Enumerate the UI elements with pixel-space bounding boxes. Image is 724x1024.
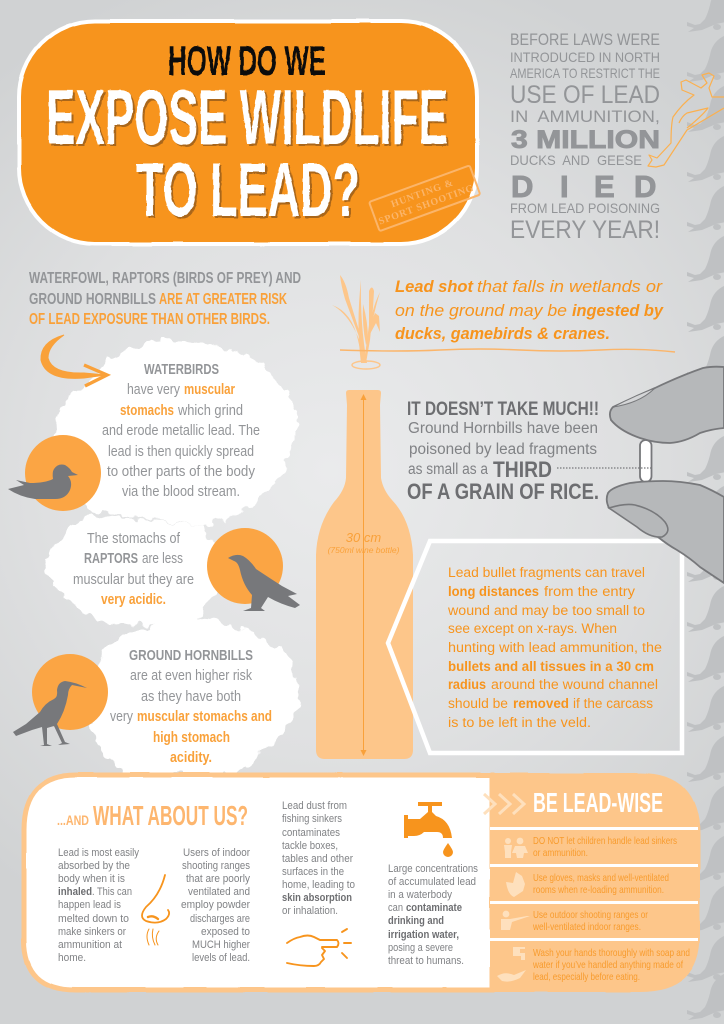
title: how do we: HOW DO WE xyxy=(168,37,326,84)
ground hornbills text: very xyxy=(110,709,134,725)
intro statistic text block: INTRODUCED IN NORTH xyxy=(510,49,660,65)
icon: pointing hand xyxy=(287,929,351,966)
text: waterbody: in a waterbody xyxy=(388,889,452,901)
bullet fragments text: should be xyxy=(448,696,508,711)
heading: birds at greater risk xyxy=(29,270,301,328)
raptors text: very acidic. xyxy=(101,592,166,608)
arrow: 30 cm height xyxy=(360,394,366,756)
text: inhaled: make sinkers or xyxy=(58,926,126,938)
text: inhaled: body when it is xyxy=(58,873,125,885)
bottom finger xyxy=(607,481,724,583)
intro statistic text block: 3 MILLION xyxy=(511,126,660,154)
text: inhaled: happen lead is xyxy=(58,899,121,911)
text: waterbody: drinking and xyxy=(388,915,444,927)
intro statistic text block: EVERY YEAR! xyxy=(510,216,660,244)
title: to lead xyxy=(136,148,362,235)
text: waterbody: Large concentrations xyxy=(388,863,478,875)
ground hornbills text: muscular stomachs and xyxy=(137,709,272,725)
raptors text: The stomachs of xyxy=(87,531,181,547)
text: lead dust xyxy=(282,800,355,917)
callout: lead shot xyxy=(395,277,664,343)
text: indoor shooting ranges: exposed to xyxy=(201,926,250,938)
waterbirds text xyxy=(102,362,260,500)
text: lead dust: tackle boxes, xyxy=(282,840,338,852)
heading: birds at greater risk: ARE AT GREATER RISK xyxy=(159,291,288,308)
panel: ground hornbills xyxy=(13,648,272,766)
raptors text xyxy=(73,531,194,608)
text block: it doesn't take much: THIRD xyxy=(493,457,552,482)
bullet fragments text: from the entry xyxy=(544,584,635,599)
intro statistic text block: IN AMMUNITION, xyxy=(510,108,660,126)
text: indoor shooting ranges: employ powder xyxy=(181,899,250,911)
text: indoor shooting ranges: Users of indoor xyxy=(183,847,250,859)
icon: water tap xyxy=(404,802,453,857)
text: waterbody: of accumulated lead xyxy=(388,876,476,888)
text: indoor shooting ranges: shooting ranges xyxy=(182,860,250,872)
heading: birds at greater risk: OF LEAD EXPOSURE THAN OTHER BIRDS. xyxy=(29,311,270,328)
title: expose wildlife xyxy=(46,73,450,163)
tip: outdoor ranges: well-ventilated indoor ranges. xyxy=(532,922,641,933)
ground hornbills text: GROUND HORNBILLS xyxy=(129,648,253,664)
text: indoor shooting ranges: MUCH higher xyxy=(192,939,250,951)
icon: glove xyxy=(506,872,525,897)
waterbirds text: to other parts of the body xyxy=(107,464,256,480)
text: indoor shooting ranges: ventilated and xyxy=(188,886,250,898)
title: to lead: TO LEAD? xyxy=(138,150,362,235)
tip: children: or ammunition. xyxy=(533,848,588,859)
text: indoor shooting ranges: that are poorly xyxy=(186,873,250,885)
tip: wash hands: lead, especially before eating. xyxy=(533,972,640,983)
text: indoor shooting ranges: discharges are xyxy=(190,913,250,925)
callout: lead shot: on the ground may be xyxy=(395,301,567,320)
raptors text: RAPTORS xyxy=(84,551,138,567)
text block: it doesn't take much: poisoned by lead fragments xyxy=(409,441,597,458)
intro statistic text block: DUCKS AND GEESE xyxy=(510,152,642,168)
heading: what about us: WHAT ABOUT US? xyxy=(93,800,248,831)
chart: wine bottle scale xyxy=(316,390,413,759)
title panel xyxy=(19,21,480,244)
bottle label xyxy=(328,530,400,555)
intro statistic text block: BEFORE LAWS WERE xyxy=(510,31,660,49)
side pattern: falling birds xyxy=(687,0,724,1020)
tip: gloves: Use gloves, masks and well-ventilated xyxy=(533,873,669,884)
text: lead dust: contaminates xyxy=(282,827,340,839)
text: inhaled: ammunition at xyxy=(58,939,123,951)
bottle label: 30 cm xyxy=(346,530,381,545)
panel: raptors xyxy=(73,528,300,611)
text: waterbody: irrigation water, xyxy=(388,929,459,941)
heading: what about us: ...AND xyxy=(57,812,89,828)
text block: it doesn't take much: OF A GRAIN OF RICE. xyxy=(407,479,599,504)
icon: shooter xyxy=(501,911,530,930)
intro statistic text block: AMERICA TO RESTRICT THE xyxy=(510,65,660,81)
waterbirds text: stomachs xyxy=(120,403,174,419)
dividers xyxy=(490,827,698,941)
icon: nose xyxy=(142,875,169,945)
intro statistic text block: USE OF LEAD xyxy=(510,81,660,109)
callout: lead shot: ducks, gamebirds & cranes. xyxy=(395,324,610,343)
text block: it doesn't take much: as small as a xyxy=(408,461,488,478)
intro statistic text block: DIED xyxy=(511,169,656,204)
tip: children xyxy=(504,836,677,859)
bullet fragments text: wound and may be too small to xyxy=(447,603,645,618)
rice grain xyxy=(640,440,652,482)
tip: outdoor ranges xyxy=(501,910,648,933)
bullet fragments text: bullets and all tissues in a 30 cm xyxy=(448,659,654,674)
intro statistic text block xyxy=(510,31,660,244)
icon: raptor on orange circle xyxy=(207,528,300,611)
icon: orange duck outline xyxy=(648,73,724,167)
text: lead dust: or inhalation. xyxy=(282,905,338,917)
waterbirds text: which grind xyxy=(177,403,243,419)
bullet fragments text: removed xyxy=(513,696,569,711)
bullet fragments text: long distances xyxy=(448,584,539,599)
text: waterbody: can xyxy=(388,902,403,914)
callout: bullet fragments box xyxy=(388,541,682,753)
stamp: hunting and sport shooting: HUNTING & xyxy=(390,177,455,210)
top finger xyxy=(610,367,724,443)
text: lead dust: surfaces in the xyxy=(282,866,344,878)
waterbirds text: have very xyxy=(127,382,181,398)
bullet fragments text: hunting with lead ammunition, the xyxy=(448,640,662,655)
text: lead dust: skin absorption xyxy=(282,892,352,904)
waterbirds text: WATERBIRDS xyxy=(144,362,219,378)
intro statistic text block: FROM LEAD POISONING xyxy=(510,200,660,216)
tip: wash hands: water if you’ve handled anything made of xyxy=(532,960,683,971)
stamp: hunting and sport shooting xyxy=(369,165,480,231)
text: indoor shooting ranges xyxy=(181,847,250,964)
icon: reeds xyxy=(332,275,380,369)
heading: birds at greater risk: GROUND HORNBILLS xyxy=(29,291,156,308)
text: inhaled: . This can xyxy=(92,886,132,898)
tip: gloves xyxy=(506,872,669,897)
waterbirds text: lead is then quickly spread xyxy=(108,444,254,460)
text: lead dust: Lead dust from xyxy=(282,800,347,812)
text: inhaled: absorbed by the xyxy=(58,860,130,872)
text: waterbody: threat to humans. xyxy=(388,955,464,967)
bullet fragments text: see except on x-rays. When xyxy=(448,621,617,636)
ground hornbills text: high stomach xyxy=(153,730,230,746)
text block: it doesn't take much xyxy=(407,399,599,504)
tip: gloves: rooms when re-loading ammunition. xyxy=(533,885,664,896)
callout: lead shot: Lead shot xyxy=(395,277,474,296)
text: waterbody xyxy=(388,863,478,967)
waterbirds text: muscular xyxy=(184,382,235,398)
icon: children xyxy=(504,838,528,858)
icon: duck on orange circle xyxy=(8,435,101,511)
text: inhaled xyxy=(58,847,139,964)
panel: waterbirds xyxy=(8,362,260,511)
divider line: water surface xyxy=(340,349,675,352)
ground hornbills text: as they have both xyxy=(141,689,241,705)
stamp: hunting and sport shooting: SPORT SHOOTING xyxy=(377,183,476,227)
icon: chevrons xyxy=(484,794,524,814)
title: to lead: TO LEAD? xyxy=(136,148,360,233)
text: waterbody: contaminate xyxy=(406,902,462,914)
ground hornbills text xyxy=(110,648,272,766)
tip: outdoor ranges: Use outdoor shooting ranges or xyxy=(533,910,648,921)
waterbirds text: via the blood stream. xyxy=(122,484,240,500)
white brush blobs xyxy=(45,340,299,775)
heading: birds at greater risk: WATERFOWL, RAPTORS (BIRDS OF PREY) AND xyxy=(29,270,301,287)
text: waterbody: posing a severe xyxy=(388,942,453,954)
tip: wash hands xyxy=(497,947,690,983)
callout: lead shot: that falls in wetlands or xyxy=(477,277,663,296)
callout: lead shot: ingested by xyxy=(572,301,664,320)
bullet fragments text: is to be left in the veld. xyxy=(448,715,591,730)
tip: children: DO NOT let children handle lead sinkers xyxy=(533,836,677,847)
ground hornbills text: acidity. xyxy=(170,750,212,766)
text: inhaled: Lead is most easily xyxy=(58,847,139,859)
waterbirds text: and erode metallic lead. The xyxy=(102,423,260,439)
panel: be lead-wise xyxy=(484,773,700,992)
text: inhaled: melted down to xyxy=(58,913,129,925)
raptors text: are less xyxy=(142,551,183,567)
icon: hornbill on orange circle xyxy=(13,654,108,746)
text: inhaled: home. xyxy=(58,952,86,964)
text block: it doesn't take much: Ground Hornbills have been xyxy=(408,420,598,437)
raptors text: muscular but they are xyxy=(73,572,194,588)
bottle label: (750ml wine bottle) xyxy=(328,545,400,555)
text: lead dust: home, leading to xyxy=(282,879,355,891)
bullet fragments text: around the wound channel xyxy=(491,677,658,692)
icon: fingers holding rice grain xyxy=(557,367,724,583)
bullet fragments text: Lead bullet fragments can travel xyxy=(448,565,645,580)
text: inhaled: inhaled xyxy=(58,886,92,898)
bullet fragments text xyxy=(447,565,662,730)
heading: what about us xyxy=(57,800,248,831)
panel: and what about us xyxy=(24,775,492,990)
text block: it doesn't take much: IT DOESN’T TAKE MUCH!! xyxy=(407,399,599,420)
text: indoor shooting ranges: levels of lead. xyxy=(192,952,250,964)
icon: tap and hand xyxy=(497,947,526,982)
bullet fragments text: radius xyxy=(448,677,486,692)
bullet fragments text: if the carcass xyxy=(573,696,653,711)
arrow: curved pointer xyxy=(41,335,107,386)
ground hornbills text: are at even higher risk xyxy=(130,668,253,684)
text: lead dust: fishing sinkers xyxy=(282,813,342,825)
text: lead dust: tables and other xyxy=(282,853,353,865)
